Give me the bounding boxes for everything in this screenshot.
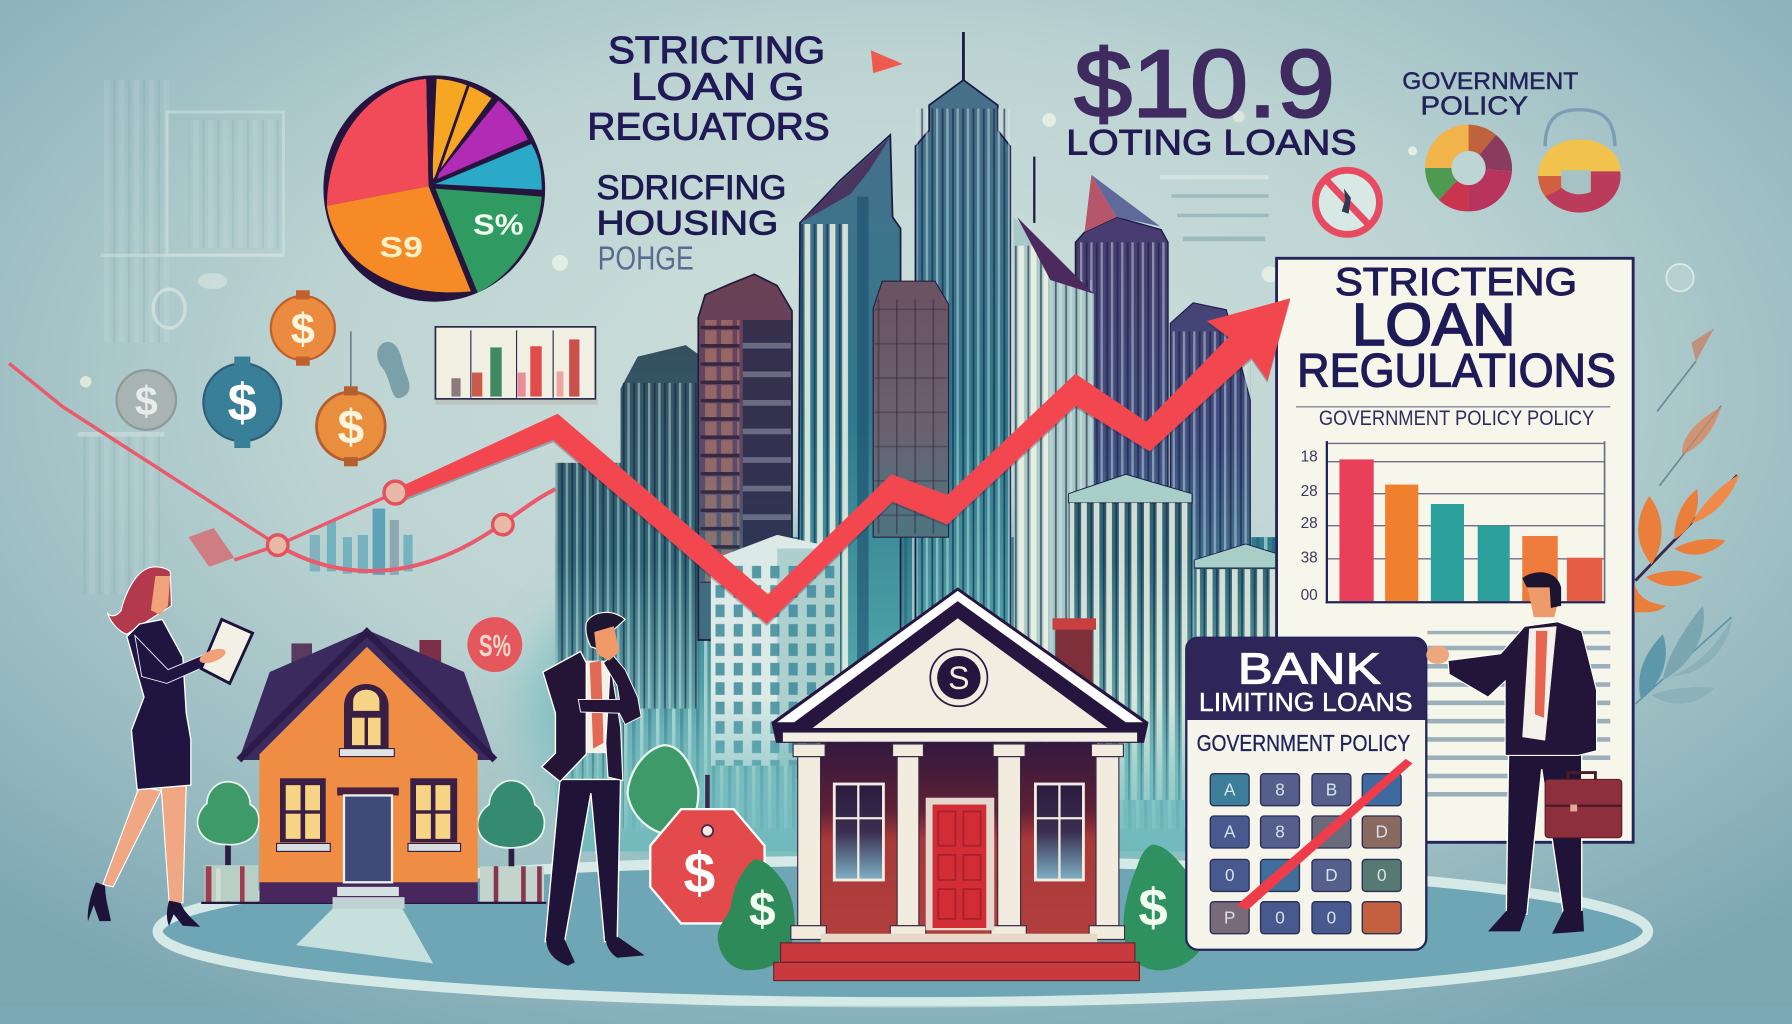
icon: grey dollar coin: $ bbox=[135, 378, 158, 424]
skyline fade bbox=[555, 697, 1298, 851]
regulations document bbox=[1277, 258, 1633, 842]
building: small teal roof block bbox=[1194, 544, 1297, 686]
shirt bbox=[1522, 626, 1557, 741]
faint teal bars behind the thin trend line bbox=[310, 509, 413, 575]
jacket left bbox=[542, 651, 586, 782]
torso and skirt bbox=[127, 619, 191, 790]
slice: red bbox=[327, 79, 429, 206]
shirt bbox=[586, 661, 610, 753]
streaked backdrop bbox=[555, 537, 1298, 829]
faint upper branch bbox=[1657, 264, 1721, 486]
skyline buildings bbox=[555, 32, 1298, 851]
axis labels: 00 bbox=[1301, 587, 1318, 604]
medallion bbox=[930, 649, 987, 706]
icon: orange dollar coin upper: $ bbox=[291, 306, 315, 354]
keypad characters: B bbox=[1326, 779, 1337, 799]
heading: stricting housing policy: POHGE bbox=[598, 241, 694, 278]
bank building bbox=[771, 587, 1149, 981]
icon: padlock donut bbox=[1538, 110, 1621, 213]
house bbox=[198, 630, 546, 963]
text lines bbox=[1427, 631, 1610, 797]
red price tag: $ bbox=[684, 842, 715, 906]
icon: teal dollar coin: $ bbox=[228, 374, 257, 433]
icon: orange dollar coin upper bbox=[271, 290, 335, 366]
head bbox=[1525, 575, 1561, 617]
legs bbox=[103, 786, 161, 887]
slice: yellow bbox=[432, 79, 491, 181]
heading: government policy: GOVERNMENT bbox=[1402, 68, 1579, 95]
keypad characters: 8 bbox=[1275, 779, 1285, 799]
path bbox=[296, 909, 433, 963]
blue leaves bbox=[1635, 606, 1733, 704]
icon: prohibition sign bbox=[1315, 170, 1379, 234]
icon: donut chart bbox=[1425, 125, 1512, 211]
keypad characters: 0 bbox=[1327, 907, 1336, 927]
foliage bbox=[1634, 264, 1739, 704]
teal glow behind the skyline bbox=[526, 514, 1349, 903]
pie label: S% bbox=[473, 209, 523, 241]
heading: stricting loan regulators: STRICTING bbox=[608, 29, 825, 71]
title bbox=[1297, 261, 1616, 396]
arm bbox=[578, 655, 641, 725]
pie chart bbox=[323, 75, 545, 302]
trees bbox=[198, 781, 544, 903]
axis labels: 38 bbox=[1301, 549, 1318, 566]
subheading: loting loans: LOTING LOANS bbox=[1066, 122, 1357, 162]
icon: grey dollar coin bbox=[117, 370, 176, 430]
orange leaves bbox=[1634, 474, 1739, 613]
shoes bbox=[1488, 911, 1527, 931]
icon: orange dollar coin lower: $ bbox=[338, 401, 365, 454]
gable and wall bbox=[259, 647, 478, 886]
keypad characters: D bbox=[1376, 822, 1388, 842]
jacket right bbox=[606, 663, 623, 781]
left shoe bbox=[88, 882, 111, 921]
panel subtitle: LIMITING LOANS bbox=[1199, 687, 1413, 717]
headline figure: $10.9 bbox=[1074, 31, 1335, 138]
plinth bbox=[259, 882, 478, 903]
right shoe bbox=[167, 901, 200, 927]
title: LOAN bbox=[1352, 291, 1515, 358]
subtitle: GOVERNMENT POLICY POLICY bbox=[1319, 405, 1594, 430]
head bbox=[586, 612, 625, 651]
columns bbox=[791, 744, 1125, 939]
icon: teal dollar coin bbox=[203, 357, 281, 448]
bank limiting loans calculator panel bbox=[1186, 638, 1426, 950]
heading: government policy bbox=[1402, 68, 1579, 120]
panel policy label: GOVERNMENT POLICY bbox=[1197, 730, 1410, 756]
right window bbox=[1035, 784, 1083, 880]
woman with tablet bbox=[88, 567, 253, 927]
tablet bbox=[201, 619, 253, 683]
building: far right purple bbox=[1170, 303, 1250, 651]
red price tag bbox=[650, 775, 765, 923]
icon: orange dollar coin lower bbox=[317, 331, 385, 466]
node on arrow start bbox=[384, 481, 407, 504]
faded background chart motifs bbox=[78, 80, 1417, 594]
title: REGULATIONS bbox=[1297, 344, 1616, 396]
slice: green bbox=[435, 189, 542, 293]
bank building: S bbox=[948, 660, 970, 696]
ground disc bbox=[0, 861, 1792, 1024]
wall bbox=[821, 743, 1097, 935]
building: pink roof tower bbox=[1075, 175, 1168, 789]
red slash bbox=[1237, 759, 1413, 910]
keypad characters: P bbox=[1224, 907, 1235, 927]
chimneys bbox=[291, 643, 312, 675]
main red arrow bbox=[400, 298, 1290, 626]
icon: red percent circle bbox=[467, 617, 522, 672]
hand bbox=[1426, 646, 1449, 664]
right window bbox=[410, 778, 457, 842]
bush bbox=[627, 745, 698, 835]
building: far left block bbox=[555, 463, 624, 829]
heading: stricting housing policy: SDRICFING bbox=[597, 169, 786, 207]
keypad characters: 0 bbox=[1275, 907, 1285, 927]
heading: stricting housing policy: HOUSING bbox=[597, 204, 778, 242]
arm bbox=[135, 635, 208, 683]
briefcase bbox=[1545, 779, 1622, 838]
slice: orange bbox=[327, 186, 471, 292]
small bar chart card bbox=[435, 327, 598, 405]
green money bag left: $ bbox=[749, 884, 776, 937]
pie label: S9 bbox=[379, 232, 423, 264]
building: translucent brown tower bbox=[873, 281, 949, 537]
slice: purple bbox=[433, 101, 528, 181]
keypad characters bbox=[1224, 779, 1388, 927]
bar chart bbox=[1301, 441, 1605, 604]
steps bbox=[337, 887, 399, 896]
heading: stricting housing policy bbox=[597, 169, 786, 278]
roof bbox=[771, 587, 1149, 743]
axis labels: 28 bbox=[1301, 515, 1318, 532]
steps bbox=[821, 934, 1097, 943]
building: brick tower bbox=[698, 274, 792, 640]
building: central tall tower bbox=[915, 32, 1010, 777]
heading: stricting loan regulators: REGUATORS bbox=[587, 105, 830, 147]
legs bbox=[1506, 753, 1582, 914]
title: STRICTENG bbox=[1335, 261, 1577, 304]
door bbox=[337, 787, 399, 795]
roof bbox=[239, 630, 495, 760]
trend line nodes bbox=[267, 514, 513, 555]
heading: stricting loan regulators: LOAN G bbox=[631, 65, 805, 107]
jacket bbox=[1448, 622, 1597, 755]
green money bag left bbox=[718, 859, 795, 970]
icon: red percent circle: S% bbox=[479, 628, 511, 663]
axis labels: 18 bbox=[1301, 449, 1318, 466]
slice: blue bbox=[435, 144, 542, 190]
tie bbox=[590, 661, 603, 749]
tie bbox=[1535, 631, 1547, 718]
building: white window block bbox=[711, 535, 840, 766]
pensive man bbox=[542, 612, 645, 966]
legs bbox=[545, 779, 621, 942]
left window bbox=[834, 784, 883, 880]
hair bbox=[107, 567, 171, 634]
hand bbox=[198, 646, 227, 666]
keypad characters: D bbox=[1325, 865, 1338, 885]
axis labels bbox=[1301, 449, 1318, 604]
thin red trend line bbox=[9, 363, 555, 571]
building: left tall tower bbox=[798, 135, 901, 777]
fence bbox=[201, 865, 546, 904]
round window bbox=[344, 684, 389, 749]
keypad characters: A bbox=[1224, 779, 1236, 799]
keypad characters: 0 bbox=[1377, 865, 1386, 885]
building: cream wedge tower bbox=[1014, 157, 1094, 789]
door bbox=[926, 798, 994, 930]
keypad characters: 0 bbox=[1225, 865, 1234, 885]
chimney bbox=[1056, 626, 1093, 683]
heading: government policy: POLICY bbox=[1421, 90, 1528, 120]
green money bag right: $ bbox=[1139, 879, 1168, 938]
panel title: BANK bbox=[1238, 645, 1381, 693]
keypad characters: A bbox=[1224, 822, 1236, 842]
flag bbox=[871, 50, 903, 73]
heading: stricting loan regulators bbox=[587, 29, 830, 147]
building: teal roof right block bbox=[1069, 474, 1192, 800]
keypad characters: 8 bbox=[1275, 822, 1285, 842]
left window bbox=[280, 778, 326, 842]
building: grey teal block bbox=[621, 345, 698, 709]
green money bag right bbox=[1123, 845, 1208, 970]
axis labels: 28 bbox=[1301, 483, 1318, 500]
shoes bbox=[546, 939, 575, 966]
face bbox=[151, 576, 170, 615]
businessman with briefcase bbox=[1426, 572, 1622, 934]
keypad bbox=[1210, 774, 1401, 934]
